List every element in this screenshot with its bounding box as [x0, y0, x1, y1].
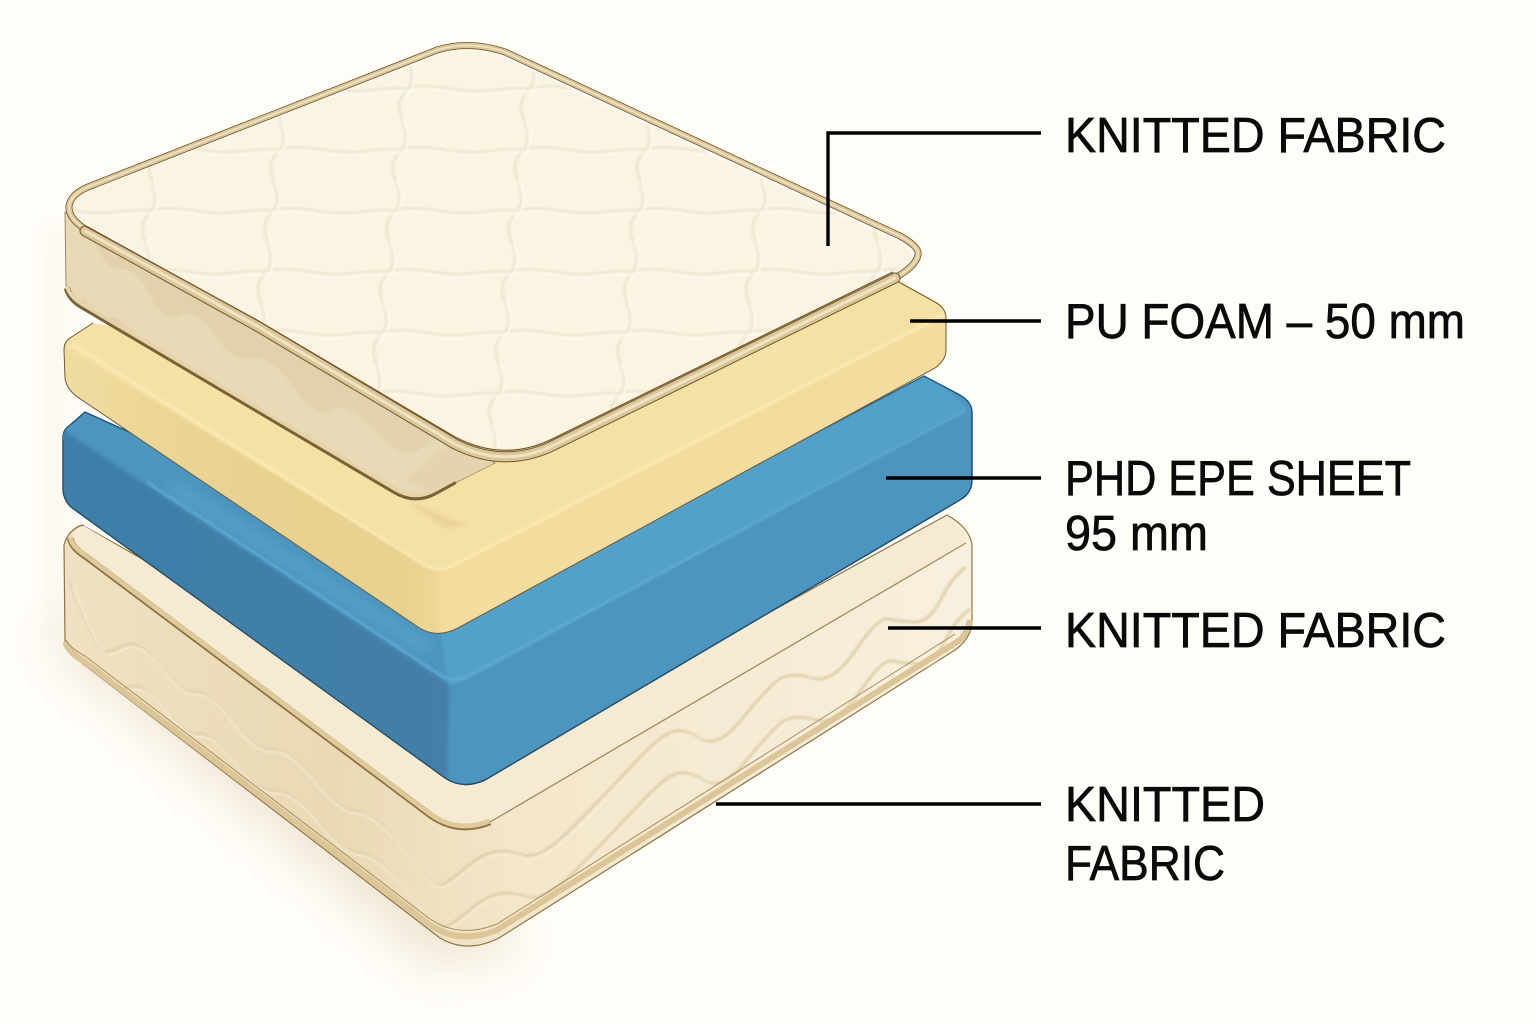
label: PHD EPE sheet 95 mm [886, 452, 1411, 561]
top front piping [85, 231, 895, 457]
label: PHD EPE sheet 95 mm: 95 mm [1065, 507, 1208, 561]
top back piping [69, 45, 918, 278]
top inner seam line [85, 226, 893, 450]
blue body [63, 376, 972, 785]
label: knitted fabric bottom: FABRIC [1065, 837, 1225, 891]
blue shaded faces [60, 377, 966, 790]
yellow outline [64, 281, 946, 633]
bottom layer lower piping [65, 620, 970, 936]
bottom layer body [64, 515, 972, 946]
blue outline [63, 412, 972, 785]
bottom layer upper piping [70, 538, 490, 827]
layer: PHD EPE sheet (blue) [60, 376, 972, 790]
bottom layer top strip [72, 516, 966, 827]
label: knitted fabric bottom: KNITTED [1065, 778, 1265, 832]
layer: PU foam (yellow) [60, 270, 950, 640]
top quilted face [71, 50, 912, 450]
layer: bottom knitted fabric [64, 515, 972, 946]
layer: top knitted fabric [65, 45, 918, 503]
drop shadow [45, 230, 520, 965]
label: knitted fabric top [828, 109, 1446, 246]
label: PHD EPE sheet 95 mm: PHD EPE SHEET [1065, 452, 1411, 506]
bottom side quilting waves [70, 567, 972, 930]
yellow shaded faces [70, 312, 945, 632]
top side panel [65, 212, 495, 499]
label: knitted fabric top: KNITTED FABRIC [1065, 109, 1446, 163]
label: PU foam 50 mm: PU FOAM – 50 mm [1065, 295, 1465, 349]
top lower piping [67, 288, 455, 497]
yellow body [64, 281, 946, 633]
label: knitted fabric bottom [716, 778, 1265, 891]
label: knitted fabric middle: KNITTED FABRIC [1065, 604, 1446, 658]
top side waves [83, 245, 494, 487]
